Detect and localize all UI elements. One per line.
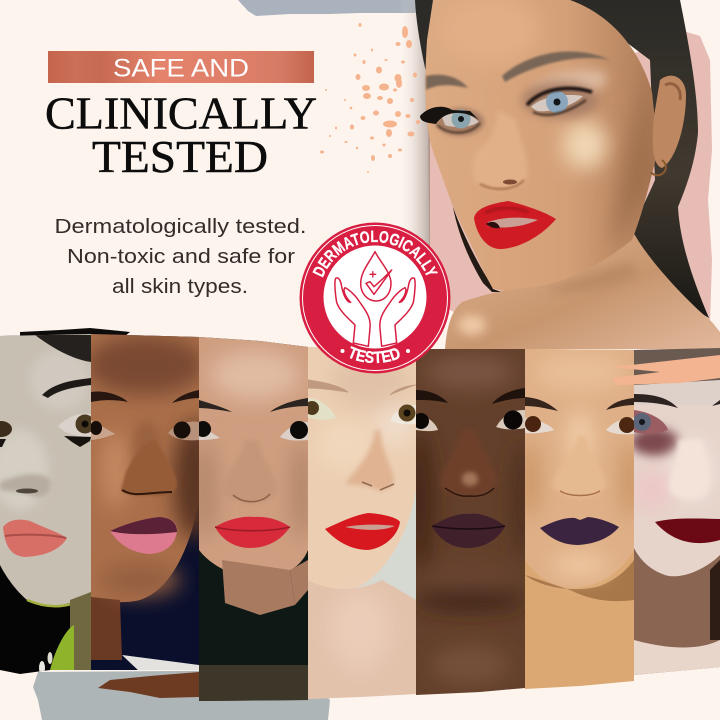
ear: [653, 76, 686, 168]
earring: [651, 160, 666, 175]
description text: [54, 215, 306, 298]
face strip 3: red lips black lace: [199, 337, 308, 701]
hair behind: [570, 0, 709, 318]
eyes: [58, 414, 94, 447]
eyes: [90, 420, 199, 440]
badge arc text top: DERMATOLOGICALLY: [312, 230, 438, 278]
badge dots: [340, 349, 410, 353]
peach torn brush stroke: [612, 355, 720, 385]
face shading: [461, 4, 656, 237]
badge arc text bottom: TESTED: [350, 346, 400, 364]
face strip 5: deep skin dark lips: [416, 349, 525, 695]
face strip 7: white skin dark red lips: [630, 345, 720, 680]
nose: [121, 440, 177, 496]
lips: [3, 520, 67, 557]
shadow left of portrait: [398, 0, 430, 262]
title bar: [48, 51, 314, 83]
main heading: [45, 88, 317, 182]
lace: [199, 665, 308, 703]
hair: [35, 335, 91, 362]
description text: Dermatologically tested.: [54, 215, 306, 238]
portrait: model with red lips: [415, 0, 720, 349]
nose: [0, 474, 50, 497]
neck and shoulders: [445, 230, 720, 349]
face strip 2: brown skin plum lips: [91, 334, 199, 670]
grey paint stroke top: [238, 0, 420, 16]
main heading: CLINICALLY: [45, 88, 317, 138]
red lips: [474, 201, 556, 249]
nose: [474, 110, 527, 190]
description text: Non-toxic and safe for: [67, 245, 295, 268]
right eye: [522, 82, 598, 118]
face strip 4: freckled pale skin red lips: [305, 345, 416, 700]
badge: dermatologically tested: [300, 222, 450, 374]
lips: [110, 517, 177, 554]
face: [425, 0, 658, 290]
bottom grey paint stroke: [33, 670, 330, 720]
face strip 6: tan skin purple lips: [525, 349, 634, 689]
brown torn scrap: [98, 672, 199, 698]
eyebrows: [426, 51, 610, 90]
brows: [91, 390, 199, 403]
torn black strip: [20, 328, 130, 336]
icon: hands holding droplet: [335, 252, 415, 346]
brow: [42, 378, 91, 398]
main heading: TESTED: [92, 131, 268, 182]
chin edge line: [453, 207, 501, 292]
left eye: [420, 107, 484, 136]
orange paint splatter: [320, 23, 420, 173]
pink paper behind portrait: [428, 31, 712, 322]
face strip 1: pale skin coral lips: [0, 330, 94, 675]
description text: all skin types.: [112, 275, 248, 298]
lime collar and neck: [70, 592, 91, 670]
title bar label: SAFE AND: [113, 54, 249, 82]
